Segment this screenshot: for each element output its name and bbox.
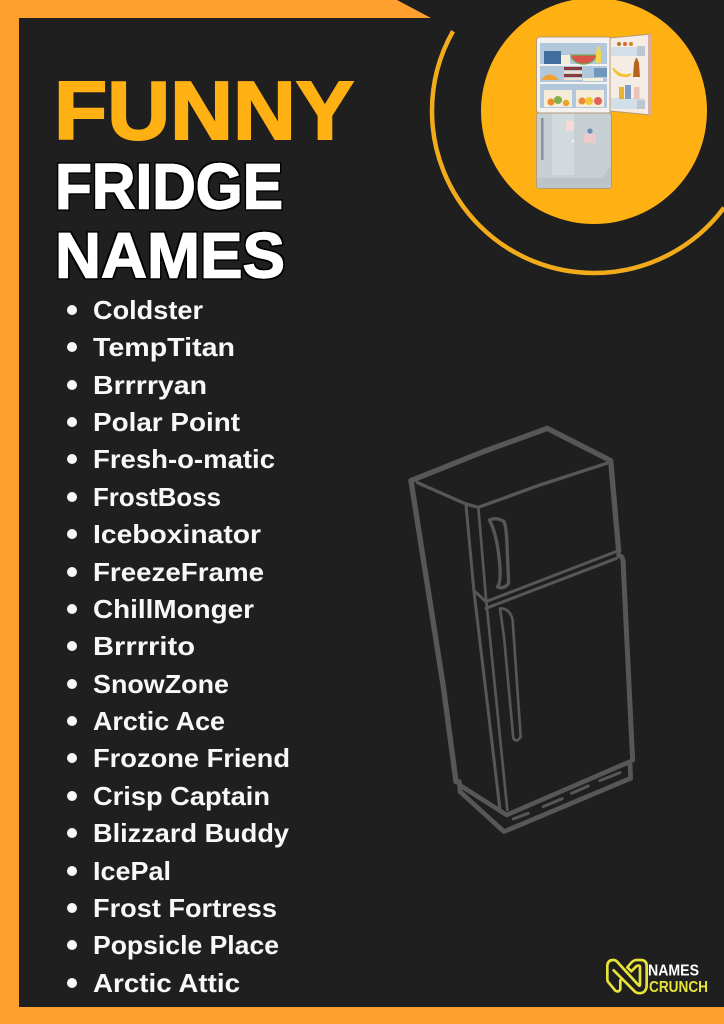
logo wordmark: CRUNCH: CRUNCH <box>649 979 708 996</box>
bulleted list of names: IcePal <box>93 856 171 886</box>
bulleted list of names: ChillMonger <box>93 594 254 624</box>
heading: NAMES: NAMES <box>55 220 285 292</box>
icon: open fridge <box>536 34 652 188</box>
bulleted list of names: Brrrrito <box>93 631 195 661</box>
bullets <box>67 305 77 988</box>
bulleted list of names: Coldster <box>93 295 203 325</box>
bulleted list of names: Polar Point <box>93 407 240 437</box>
bulleted list of names: TempTitan <box>93 332 235 362</box>
bulleted list of names: Frozone Friend <box>93 743 290 773</box>
bulleted list of names: Arctic Attic <box>93 968 240 998</box>
open door <box>610 34 652 115</box>
ring arc <box>432 31 724 273</box>
bulleted list of names: Iceboxinator <box>93 519 261 549</box>
yellow circle <box>481 0 707 224</box>
title <box>54 64 354 292</box>
bulleted list of names: SnowZone <box>93 669 229 699</box>
bulleted list of names: Brrrryan <box>93 370 207 400</box>
icon: fridge outline <box>411 428 633 832</box>
lower door <box>536 113 612 188</box>
bulleted list of names: Popsicle Place <box>93 930 279 960</box>
bulleted list of names: Arctic Ace <box>93 706 225 736</box>
logo <box>607 960 708 996</box>
bulleted list of names: FrostBoss <box>93 482 221 512</box>
icon: N mark <box>607 960 647 993</box>
bulleted list of names: Blizzard Buddy <box>93 818 290 848</box>
logo wordmark: NAMES: NAMES <box>648 962 699 980</box>
bulleted list of names: Fresh-o-matic <box>93 444 275 474</box>
bulleted list of names: FreezeFrame <box>93 557 264 587</box>
fridge interior <box>536 37 612 113</box>
bulleted list of names <box>67 295 290 998</box>
bulleted list of names: Crisp Captain <box>93 781 270 811</box>
bulleted list of names: Frost Fortress <box>93 893 277 923</box>
heading: FUNNY: FUNNY <box>54 64 354 157</box>
heading: FRIDGE: FRIDGE <box>55 150 283 222</box>
